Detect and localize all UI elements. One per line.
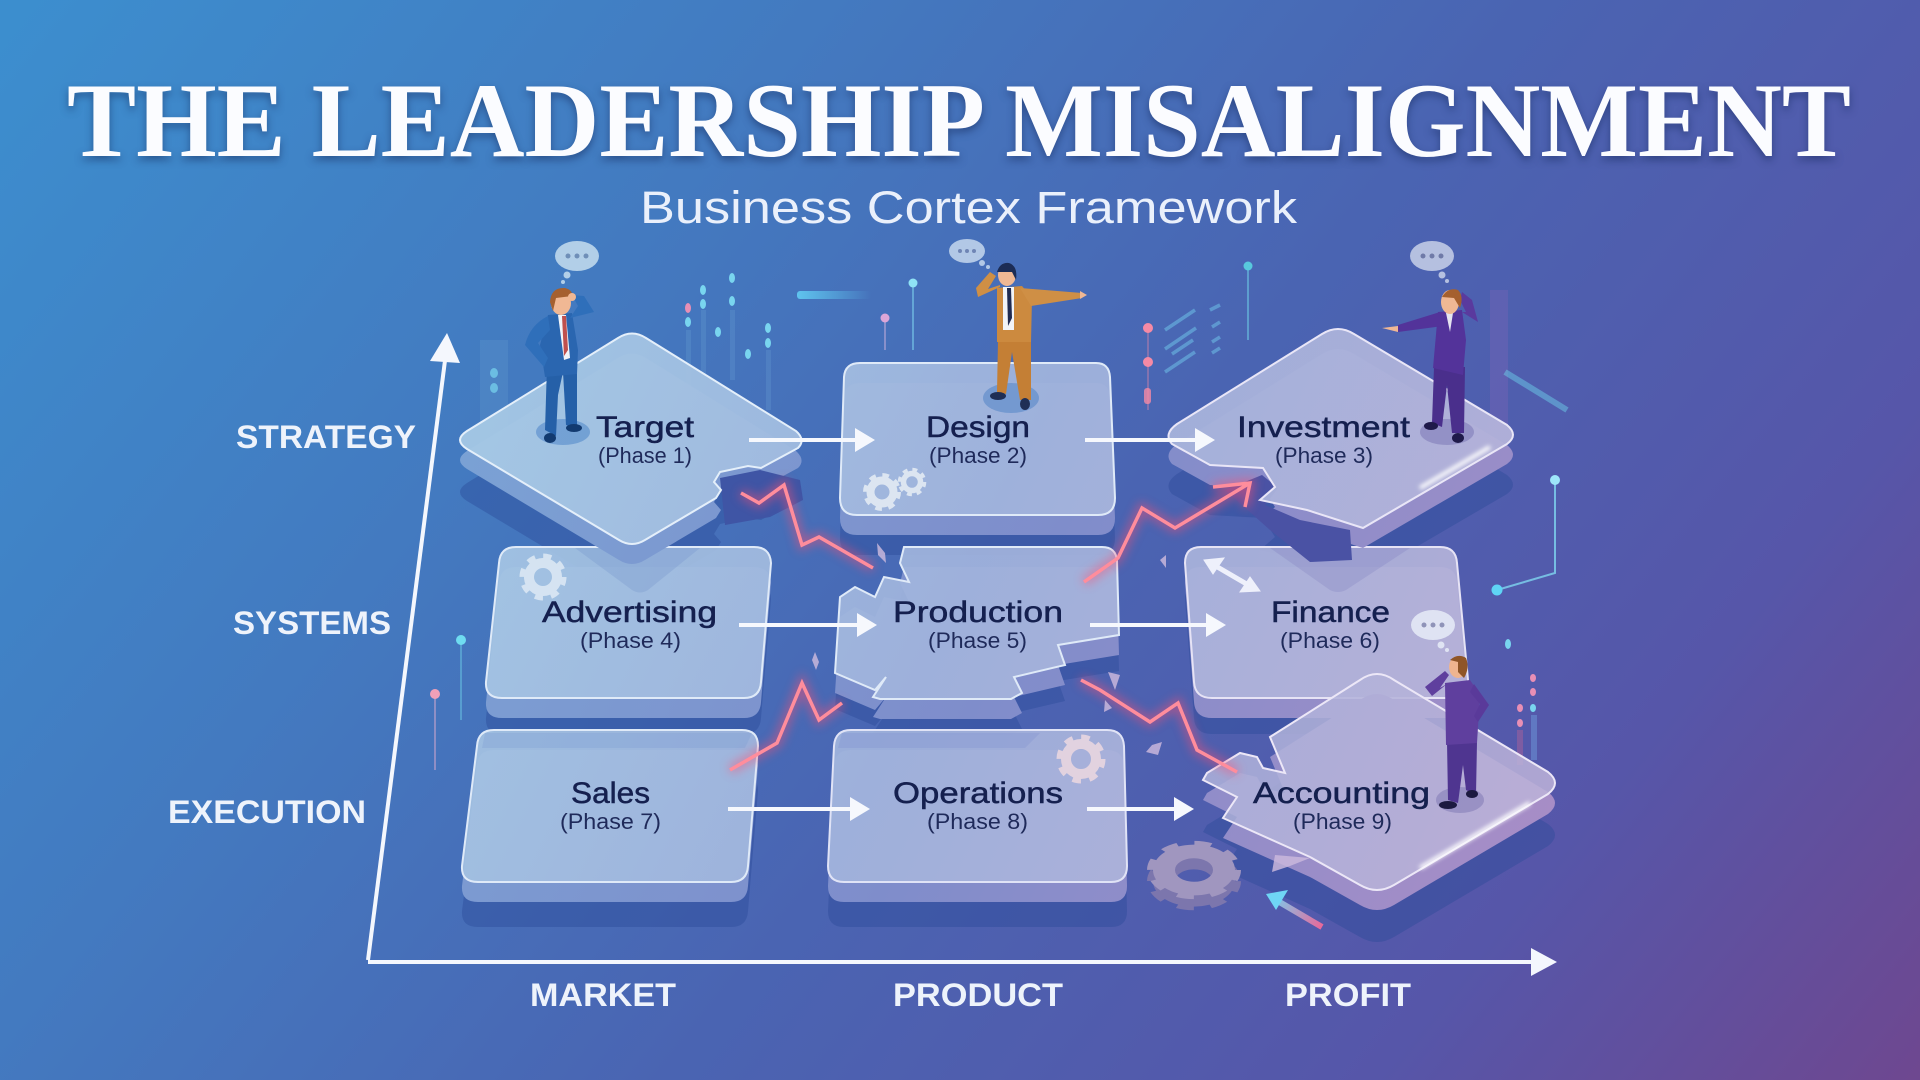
row label: systems: SYSTEMS [233,605,391,641]
arrow: operations to accounting [1087,797,1194,821]
text: design [926,411,1030,468]
arrow: target to design [749,428,875,452]
text: investment: (Phase 3) [1275,443,1373,468]
icon: large isometric gear [1152,844,1236,907]
text: operations: Operations [893,777,1063,810]
text: accounting: (Phase 9) [1293,809,1392,834]
text: operations [893,777,1063,834]
text: sales: Sales [571,777,650,810]
text: finance [1271,596,1390,653]
icon: gear [1059,737,1103,781]
text: production: Production [893,596,1063,629]
figure: blue suit leader on target [525,288,594,445]
figure: orange suit leader on design [976,263,1087,413]
subtitle: Business Cortex Framework [640,182,1298,233]
text: sales [560,777,661,834]
text: advertising [542,596,717,653]
text: finance: (Phase 6) [1280,628,1380,653]
text: target: (Phase 1) [598,443,692,468]
text: advertising: (Phase 4) [580,628,681,653]
thought bubble: accounting leader [1411,610,1455,652]
title: THE LEADERSHIP MISALIGNMENT [67,62,1851,179]
thought bubble: purple leader [1410,241,1454,283]
column label: product: PRODUCT [893,977,1063,1013]
figure: purple suit leader on accounting seen from behind [1425,656,1489,813]
text: production [893,596,1063,653]
card ground shadows [460,379,1555,942]
text: accounting: Accounting [1253,777,1430,810]
red crack lightning: production to accounting [1081,680,1237,772]
card: target phase 1 [460,334,803,564]
card: production phase 5 [835,547,1119,719]
row label: strategy: STRATEGY [236,419,416,455]
figure: purple suit leader on investment [1382,289,1478,445]
row label: execution: EXECUTION [168,794,366,830]
card: accounting phase 9 [1203,674,1555,910]
red crack lightning: production to sales [730,683,842,770]
card: finance phase 6 [1185,547,1468,718]
card: operations phase 8 [828,730,1127,902]
icon: gears [866,470,924,508]
red crack lightning: target to production [741,485,873,568]
axis: vertical [368,333,460,960]
arrow: sales to operations [728,797,870,821]
text: target [596,411,695,468]
axis: horizontal [368,948,1557,976]
arrow: advertising to production [739,613,877,637]
text: production: (Phase 5) [928,628,1027,653]
icon: gear [522,556,564,598]
column label: market: MARKET [530,977,676,1013]
decorative data particles and pins [430,262,1567,770]
text: sales: (Phase 7) [560,809,661,834]
card: design phase 2 [840,363,1115,535]
text: accounting [1253,777,1430,834]
thought bubble: orange leader [949,239,990,269]
thought bubble: blue leader [555,241,599,284]
text: design: Design [926,411,1030,444]
text: target: Target [596,411,695,444]
icon: double arrow [1204,558,1260,592]
icon: small cyan-pink arrow [1266,890,1322,927]
arrow: production to finance [1090,613,1226,637]
card: investment phase 3 [1168,329,1513,562]
arrow: design to investment [1085,428,1215,452]
card: sales phase 7 [462,730,758,902]
column label: profit: PROFIT [1285,977,1411,1013]
text: investment [1237,411,1411,468]
debris shards [812,543,1310,872]
text: design: (Phase 2) [929,443,1027,468]
text: finance: Finance [1271,596,1390,629]
text: advertising: Advertising [542,596,717,629]
card: advertising phase 4 [486,547,771,718]
text: operations: (Phase 8) [927,809,1028,834]
text: investment: Investment [1237,411,1411,444]
red crack arrow: production to investment [1084,483,1250,582]
